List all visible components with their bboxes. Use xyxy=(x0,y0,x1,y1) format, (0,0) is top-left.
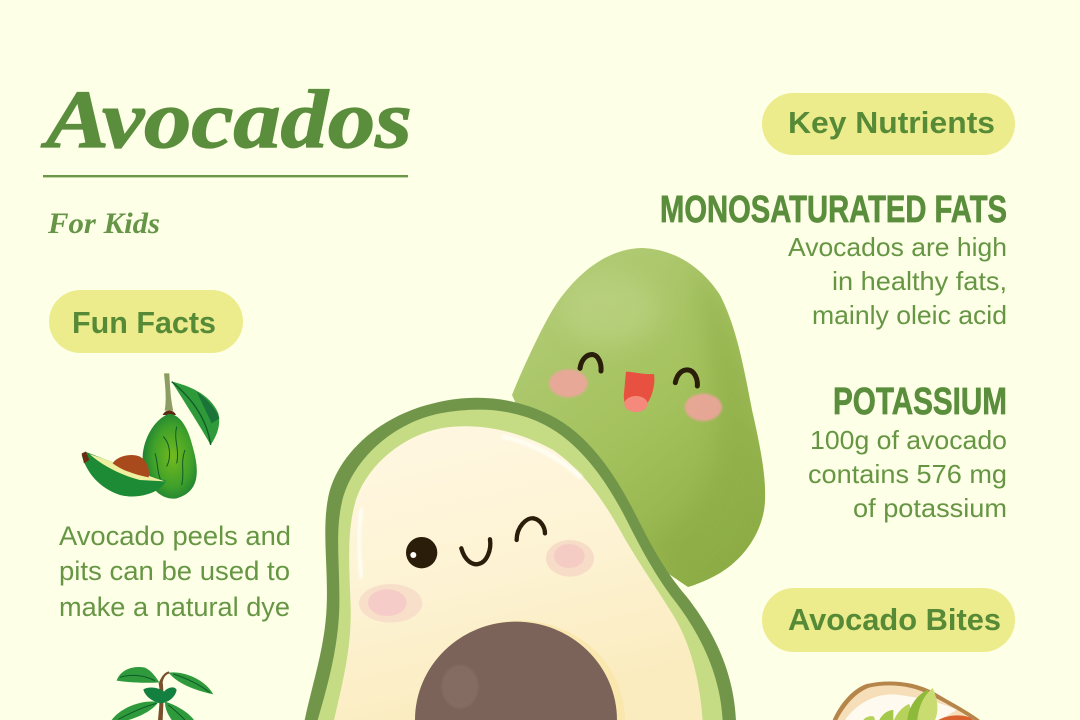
pit glow xyxy=(415,621,625,720)
back avocado character xyxy=(512,248,772,595)
pit xyxy=(415,622,617,720)
nutrient: potassium: 100g of avocado xyxy=(810,425,1007,455)
nutrient: monosaturated fats: Avocados are high xyxy=(788,232,1007,262)
nutrient: potassium: contains 576 mg xyxy=(808,459,1007,489)
flesh highlights xyxy=(503,437,580,477)
key nutrients heading pill: Key Nutrients xyxy=(788,105,995,140)
fun fact text: make a natural dye xyxy=(59,592,290,622)
nutrient: potassium: POTASSIUM xyxy=(833,381,1007,423)
back avocado shading xyxy=(566,279,766,587)
nutrient: monosaturated fats xyxy=(660,189,1007,330)
nutrient: potassium xyxy=(808,381,1007,523)
skin xyxy=(305,398,736,720)
back avocado body xyxy=(512,248,765,587)
cheeks xyxy=(546,540,594,577)
back avocado face xyxy=(549,355,722,421)
title underline xyxy=(43,175,408,177)
avocado bites heading pill xyxy=(762,588,1015,652)
nutrient: potassium: of potassium xyxy=(853,493,1007,523)
flesh xyxy=(334,426,703,720)
face xyxy=(406,537,437,568)
title: Avocados xyxy=(40,73,412,165)
fun fact text: Avocado peels and xyxy=(59,521,291,551)
icon: avocado toast xyxy=(833,681,980,720)
nutrient: monosaturated fats: in healthy fats, xyxy=(832,266,1007,296)
icon: avocado seedling xyxy=(112,667,213,720)
light green rim xyxy=(318,410,723,720)
fun fact text xyxy=(59,521,291,622)
avocado bites heading pill: Avocado Bites xyxy=(788,602,1001,637)
fun facts heading pill: Fun Facts xyxy=(72,305,216,340)
infographic canvas xyxy=(40,88,1015,720)
key nutrients heading pill xyxy=(762,93,1015,155)
nutrient: monosaturated fats: mainly oleic acid xyxy=(812,300,1007,330)
fun fact text: pits can be used to xyxy=(59,556,290,586)
subtitle: For Kids xyxy=(47,207,160,240)
icon: avocado fruit with leaf xyxy=(82,373,219,499)
main avocado half character xyxy=(305,398,736,720)
fun facts heading pill xyxy=(49,290,243,353)
